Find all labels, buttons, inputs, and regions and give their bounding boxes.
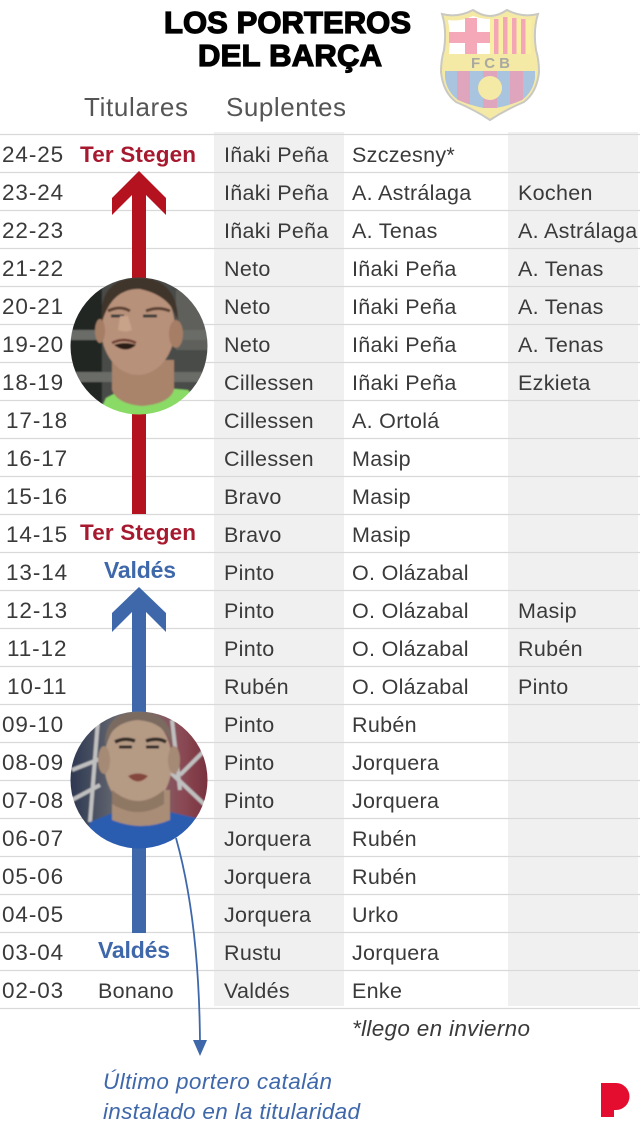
column heading: Titulares: Titulares (84, 92, 188, 122)
table of goalkeepers: Masip (352, 447, 411, 471)
table of goalkeepers: O. Olázabal (352, 599, 469, 623)
title: LOS PORTEROS (164, 5, 411, 40)
seasons column: 16-17 (6, 446, 68, 471)
table of goalkeepers: Cillessen (224, 371, 314, 395)
table of goalkeepers: A. Astrálaga (518, 219, 638, 243)
table of goalkeepers: Neto (224, 295, 271, 319)
seasons column: 24-25 (2, 142, 64, 167)
callout arrow (176, 838, 207, 1056)
footnote: *llego en invierno (352, 1016, 530, 1041)
callout text: Último portero catalán (103, 1069, 332, 1094)
logo: P (601, 1083, 630, 1117)
seasons column: 11-12 (7, 636, 67, 661)
title: DEL BARÇA (198, 38, 382, 73)
table of goalkeepers (98, 143, 638, 1003)
seasons column (2, 142, 68, 1003)
table of goalkeepers: Pinto (224, 561, 275, 585)
arrow: Valdés tenure (112, 587, 166, 933)
seasons column: 12-13 (6, 598, 68, 623)
seasons column: 20-21 (2, 294, 64, 319)
table of goalkeepers: Pinto (224, 713, 275, 737)
seasons column: 23-24 (2, 180, 64, 205)
table of goalkeepers: Szczesny* (352, 143, 455, 167)
table of goalkeepers: Iñaki Peña (224, 219, 329, 243)
table of goalkeepers: O. Olázabal (352, 637, 469, 661)
table of goalkeepers: Pinto (224, 599, 275, 623)
table of goalkeepers: O. Olázabal (352, 561, 469, 585)
column heading: Suplentes: Suplentes (226, 92, 346, 122)
seasons column: 09-10 (2, 712, 64, 737)
table of goalkeepers: Neto (224, 333, 271, 357)
seasons column: 10-11 (7, 674, 67, 699)
table of goalkeepers: Pinto (224, 751, 275, 775)
grey column backgrounds (214, 132, 638, 1006)
table of goalkeepers: A. Astrálaga (352, 181, 472, 205)
table of goalkeepers: Masip (352, 523, 411, 547)
table of goalkeepers: A. Tenas (518, 257, 604, 281)
portrait: Valdés (68, 709, 210, 852)
seasons column: 15-16 (6, 484, 68, 509)
seasons column: 19-20 (2, 332, 64, 357)
table of goalkeepers: Jorquera (352, 789, 439, 813)
table of goalkeepers: Masip (352, 485, 411, 509)
table of goalkeepers: Cillessen (224, 409, 314, 433)
seasons column: 04-05 (2, 902, 64, 927)
label: Valdés 13-14: Valdés (104, 557, 176, 583)
table of goalkeepers: Rubén (352, 827, 417, 851)
table of goalkeepers: Valdés (224, 979, 290, 1003)
table of goalkeepers: Ezkieta (518, 371, 591, 395)
label: Ter Stegen 14-15: Ter Stegen (80, 520, 196, 545)
table of goalkeepers: A. Tenas (518, 295, 604, 319)
callout text: instalado en la titularidad (103, 1099, 361, 1124)
portrait: Ter Stegen (70, 278, 208, 414)
table of goalkeepers: Kochen (518, 181, 593, 205)
label: Ter Stegen 24-25: Ter Stegen (80, 142, 196, 167)
title (164, 5, 411, 73)
table of goalkeepers: Rustu (224, 941, 282, 965)
seasons column: 13-14 (6, 560, 68, 585)
table of goalkeepers: A. Tenas (518, 333, 604, 357)
table of goalkeepers: A. Tenas (352, 219, 438, 243)
table of goalkeepers: Urko (352, 903, 399, 927)
table of goalkeepers: Bonano (98, 979, 174, 1003)
seasons column: 05-06 (2, 864, 64, 889)
seasons column: 22-23 (2, 218, 64, 243)
label: Valdés 03-04: Valdés (98, 937, 170, 963)
table of goalkeepers: Bravo (224, 523, 282, 547)
table of goalkeepers: Iñaki Peña (224, 143, 329, 167)
table of goalkeepers: Iñaki Peña (352, 295, 457, 319)
table of goalkeepers: Rubén (352, 865, 417, 889)
arrow: Ter Stegen tenure (112, 171, 166, 514)
seasons column: 14-15 (6, 522, 68, 547)
table of goalkeepers: Masip (518, 599, 577, 623)
table of goalkeepers: Iñaki Peña (352, 371, 457, 395)
table of goalkeepers: Cillessen (224, 447, 314, 471)
table of goalkeepers: Rubén (352, 713, 417, 737)
table of goalkeepers: Rubén (518, 637, 583, 661)
seasons column: 02-03 (2, 978, 64, 1003)
callout text (103, 1069, 361, 1124)
table of goalkeepers: Iñaki Peña (224, 181, 329, 205)
table of goalkeepers: A. Ortolá (352, 409, 440, 433)
table of goalkeepers: O. Olázabal (352, 675, 469, 699)
table of goalkeepers: Jorquera (352, 941, 439, 965)
table of goalkeepers: Jorquera (224, 827, 311, 851)
seasons column: 07-08 (2, 788, 64, 813)
table of goalkeepers: Jorquera (224, 865, 311, 889)
seasons column: 18-19 (2, 370, 64, 395)
table of goalkeepers: Neto (224, 257, 271, 281)
crest letters: FCB (471, 55, 510, 72)
table of goalkeepers: Jorquera (352, 751, 439, 775)
seasons column: 06-07 (2, 826, 64, 851)
table of goalkeepers: Enke (352, 979, 402, 1003)
table of goalkeepers: Pinto (224, 637, 275, 661)
icon: FC Barcelona crest (441, 10, 539, 120)
table of goalkeepers: Pinto (224, 789, 275, 813)
seasons column: 21-22 (2, 256, 64, 281)
table of goalkeepers: Iñaki Peña (352, 333, 457, 357)
seasons column: 03-04 (2, 940, 64, 965)
seasons column: 17-18 (6, 408, 68, 433)
table of goalkeepers: Rubén (224, 675, 289, 699)
seasons column: 08-09 (2, 750, 64, 775)
table of goalkeepers: Jorquera (224, 903, 311, 927)
table of goalkeepers: Iñaki Peña (352, 257, 457, 281)
table of goalkeepers: Bravo (224, 485, 282, 509)
table of goalkeepers: Pinto (518, 675, 569, 699)
